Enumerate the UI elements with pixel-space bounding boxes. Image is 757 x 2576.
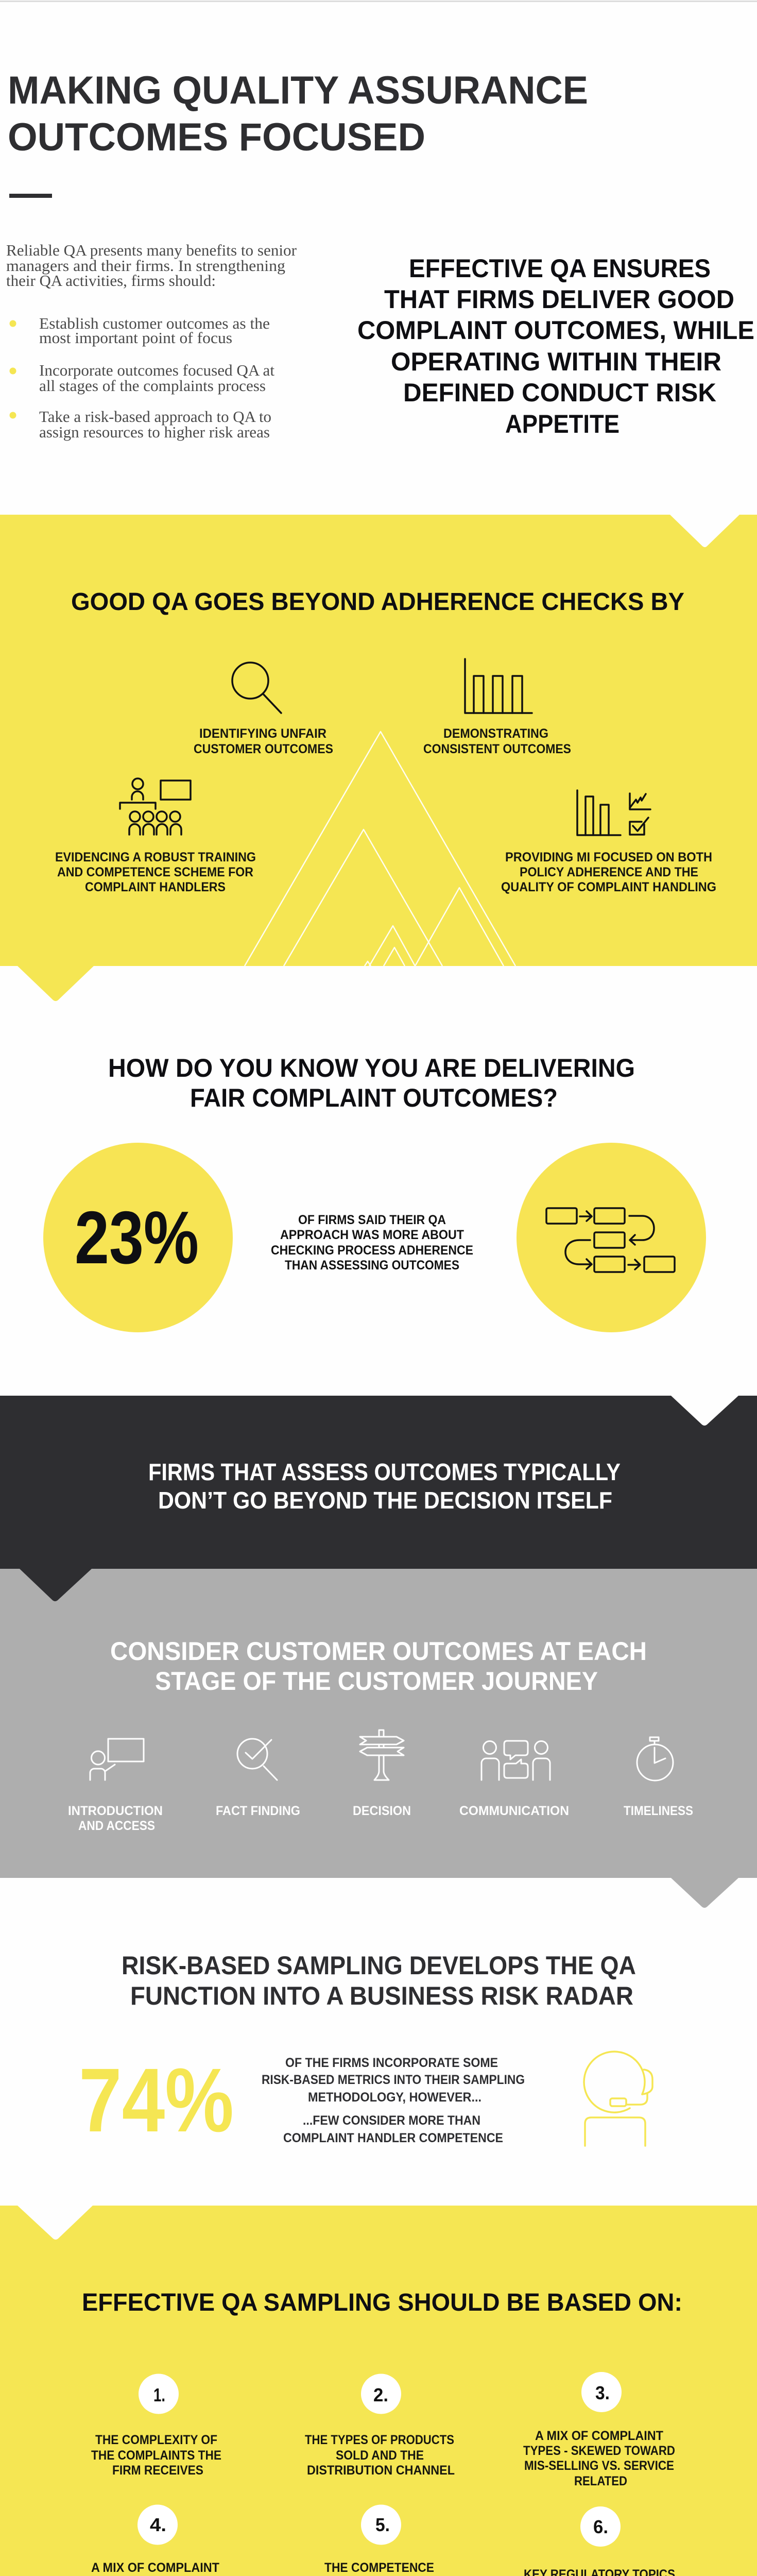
item 5: THE COMPETENCE xyxy=(324,2561,434,2575)
journey stage labels: COMMUNICATION xyxy=(459,1804,569,1818)
callout: effective QA statement: APPETITE xyxy=(505,410,620,438)
statement: FIRMS THAT ASSESS OUTCOMES TYPICALLY xyxy=(148,1459,621,1485)
stat description: ...FEW CONSIDER MORE THAN xyxy=(303,2113,480,2128)
intro paragraph: managers and their firms. In strengthening xyxy=(6,257,285,275)
label: evidencing training and competence xyxy=(55,850,256,894)
title: OUTCOMES FOCUSED xyxy=(8,115,425,159)
stat description: COMPLAINT HANDLER COMPETENCE xyxy=(283,2131,503,2145)
icon: decision signpost xyxy=(360,1730,404,1780)
title: MAKING QUALITY ASSURANCE xyxy=(8,69,588,112)
icon: timeliness stopwatch xyxy=(637,1737,673,1781)
panel: risk-based sampling xyxy=(79,1951,652,2151)
yellow panel background with notch and tab xyxy=(0,515,757,1001)
item 5 xyxy=(322,2505,440,2576)
heading: GOOD QA GOES BEYOND ADHERENCE CHECKS BY xyxy=(71,588,684,616)
stat description xyxy=(271,1213,473,1273)
title xyxy=(8,69,588,159)
icon: fact finding xyxy=(237,1739,277,1780)
label: providing MI: QUALITY OF COMPLAINT HANDLING xyxy=(501,880,716,894)
icon: training room xyxy=(120,778,191,835)
dark background with notch and tab xyxy=(0,1396,757,1601)
label: providing MI: POLICY ADHERENCE AND THE xyxy=(520,865,698,879)
bullet 1: Establish customer outcomes as the xyxy=(39,314,270,332)
item 6: 6. xyxy=(593,2516,608,2537)
callout: effective QA statement: OPERATING WITHIN THEIR xyxy=(391,347,721,376)
heading xyxy=(108,1054,635,1112)
journey stage labels: INTRODUCTION xyxy=(68,1804,163,1818)
intro paragraph xyxy=(6,241,297,290)
icon: communication xyxy=(481,1741,550,1780)
label: providing MI xyxy=(501,850,716,894)
label: evidencing training and competence: COMPLAINT HANDLERS xyxy=(85,880,226,894)
item 3: A MIX OF COMPLAINT xyxy=(535,2429,663,2443)
journey stage labels: FACT FINDING xyxy=(216,1804,300,1818)
heading: CONSIDER CUSTOMER OUTCOMES AT EACH xyxy=(110,1637,647,1666)
panel: customer journey (grey) xyxy=(0,1566,757,1908)
bullet 1 xyxy=(9,314,270,347)
item 3 xyxy=(523,2372,675,2488)
label: evidencing training and competence: AND COMPETENCE SCHEME FOR xyxy=(57,865,253,879)
callout: effective QA statement: COMPLAINT OUTCOMES, WHILE xyxy=(357,316,754,345)
item 1: THE COMPLEXITY OF xyxy=(95,2433,217,2447)
heading: STAGE OF THE CUSTOMER JOURNEY xyxy=(155,1667,598,1696)
intro paragraph: Reliable QA presents many benefits to senior xyxy=(6,241,297,259)
heading: EFFECTIVE QA SAMPLING SHOULD BE BASED ON: xyxy=(82,2289,682,2316)
panel: good QA goes beyond adherence checks xyxy=(0,515,757,1001)
icon: bar chart xyxy=(465,659,532,713)
label: demonstrating consistent outcomes xyxy=(423,726,571,756)
callout: effective QA statement: DEFINED CONDUCT RISK xyxy=(403,378,716,407)
callout: effective QA statement xyxy=(357,254,754,438)
callout: effective QA statement: EFFECTIVE QA ENSURES xyxy=(409,254,711,283)
item 1: THE COMPLAINTS THE xyxy=(91,2448,221,2463)
stat: 74%: 74% xyxy=(79,2050,234,2151)
title underline dash xyxy=(9,194,52,198)
item 4: A MIX OF COMPLAINT xyxy=(91,2561,219,2575)
item 3: 3. xyxy=(595,2382,610,2403)
item 2: DISTRIBUTION CHANNEL xyxy=(307,2463,455,2478)
bullet 2: all stages of the complaints process xyxy=(39,377,266,395)
stat description: APPROACH WAS MORE ABOUT xyxy=(280,1228,464,1242)
item 3: TYPES - SKEWED TOWARD xyxy=(523,2444,675,2458)
heading xyxy=(110,1637,647,1696)
label: identifying unfair customer outcomes: IDENTIFYING UNFAIR xyxy=(199,726,326,741)
journey stage labels xyxy=(68,1804,693,1833)
item 2: 2. xyxy=(373,2384,388,2405)
statement xyxy=(148,1459,621,1514)
panel: firms that assess outcomes (dark) xyxy=(0,1396,757,1601)
stat circle: 23% xyxy=(43,1143,233,1332)
item 3: MIS-SELLING VS. SERVICE xyxy=(524,2459,674,2473)
bullet 3: Take a risk-based approach to QA to xyxy=(39,408,271,426)
item 5: 5. xyxy=(375,2514,390,2535)
journey stage labels: AND ACCESS xyxy=(78,1819,155,1833)
intro paragraph: their QA activities, firms should: xyxy=(6,272,216,290)
item 4: 4. xyxy=(150,2514,166,2535)
bullet list xyxy=(9,314,274,441)
bullet 2 xyxy=(9,361,274,395)
journey stage labels: DECISION xyxy=(353,1804,411,1818)
label: providing MI: PROVIDING MI FOCUSED ON BOTH xyxy=(505,850,712,865)
item 1: FIRM RECEIVES xyxy=(112,2463,203,2478)
bullet 3: assign resources to higher risk areas xyxy=(39,423,270,441)
stat description: OF THE FIRMS INCORPORATE SOME xyxy=(285,2056,498,2070)
bullet 1: most important point of focus xyxy=(39,329,232,347)
yellow background with notch xyxy=(0,2206,757,2576)
heading: RISK-BASED SAMPLING DEVELOPS THE QA xyxy=(122,1951,636,1980)
item 6 xyxy=(524,2506,675,2576)
stat description: THAN ASSESSING OUTCOMES xyxy=(285,1258,459,1273)
icon: magnifier xyxy=(232,663,281,713)
journey stage labels: TIMELINESS xyxy=(624,1804,693,1818)
callout: effective QA statement: THAT FIRMS DELIVER GOOD xyxy=(384,285,734,314)
label: identifying unfair customer outcomes: CUSTOMER OUTCOMES xyxy=(194,742,333,756)
label: identifying unfair customer outcomes xyxy=(194,726,333,756)
bullet 3 xyxy=(9,408,271,441)
stat description: CHECKING PROCESS ADHERENCE xyxy=(271,1243,473,1258)
label: demonstrating consistent outcomes: CONSISTENT OUTCOMES xyxy=(423,742,571,756)
panel: effective QA sampling xyxy=(0,2206,757,2576)
stat description: OF FIRMS SAID THEIR QA xyxy=(298,1213,446,1227)
stat description: METHODOLOGY, HOWEVER... xyxy=(308,2090,481,2105)
label: demonstrating consistent outcomes: DEMONSTRATING xyxy=(443,726,548,741)
item 1: 1. xyxy=(153,2384,165,2405)
heading: HOW DO YOU KNOW YOU ARE DELIVERING xyxy=(108,1054,635,1082)
stat description: RISK-BASED METRICS INTO THEIR SAMPLING xyxy=(262,2073,525,2087)
statement: DON’T GO BEYOND THE DECISION ITSELF xyxy=(158,1487,612,1514)
icon: complaint handler headset xyxy=(584,2052,652,2146)
grey background xyxy=(0,1566,757,1908)
item 2 xyxy=(305,2374,455,2478)
stat circle: 23%: 23% xyxy=(75,1196,199,1279)
bullet 2: Incorporate outcomes focused QA at xyxy=(39,361,274,379)
decorative mountains xyxy=(245,732,515,966)
icon circle: process flow xyxy=(517,1143,706,1332)
heading: FAIR COMPLAINT OUTCOMES? xyxy=(190,1083,558,1112)
icon: MI charts and checkbox xyxy=(577,790,650,835)
item 2: SOLD AND THE xyxy=(336,2448,424,2463)
panel: how do you know xyxy=(43,1054,706,1332)
item 4 xyxy=(82,2505,229,2576)
heading xyxy=(122,1951,636,2010)
label: evidencing training and competence: EVIDENCING A ROBUST TRAINING xyxy=(55,850,256,865)
item 2: THE TYPES OF PRODUCTS xyxy=(305,2433,454,2447)
stat description xyxy=(262,2056,525,2145)
item 1 xyxy=(91,2374,221,2478)
item 3: RELATED xyxy=(574,2474,627,2488)
icon: introduction and access xyxy=(90,1739,144,1780)
heading: FUNCTION INTO A BUSINESS RISK RADAR xyxy=(130,1981,633,2010)
